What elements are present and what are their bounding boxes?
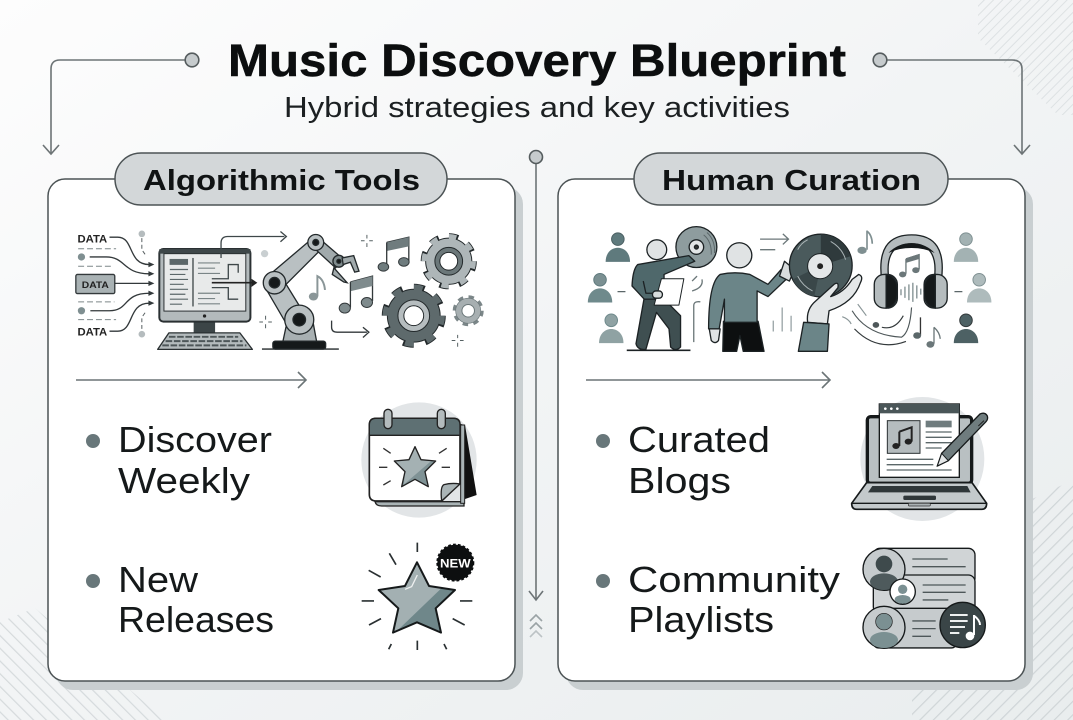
heading pill: algorithmic tools <box>115 153 447 205</box>
icon: open hand <box>798 274 862 351</box>
heading pill: algorithmic tools: Algorithmic Tools <box>143 165 420 197</box>
bullet: discover weekly <box>86 419 272 501</box>
bullet: new releases: Releases <box>118 599 274 640</box>
arrow: center divider <box>529 150 543 637</box>
icon: headphones <box>874 235 947 308</box>
icon: gears <box>387 238 481 342</box>
title: Music Discovery Blueprint <box>228 35 846 86</box>
sound waves and notes <box>760 231 940 348</box>
icon: robot arm <box>262 235 359 349</box>
subtitle: Hybrid strategies and key activities <box>284 92 790 124</box>
icon: calendar star <box>361 402 477 518</box>
illustration: data to machine <box>76 231 481 349</box>
illustration: curators and vinyl <box>588 227 991 351</box>
bullet: new releases <box>86 559 274 640</box>
sparkles <box>259 235 464 347</box>
icon: new star <box>362 543 473 650</box>
arrow: left connector <box>43 53 199 154</box>
arrow: left flow <box>76 372 306 388</box>
heading pill: human curation <box>634 153 948 205</box>
icon: desktop computer <box>158 232 286 349</box>
bullet: curated blogs: Curated <box>628 419 770 460</box>
audience icons <box>588 233 991 343</box>
data inputs <box>76 231 154 339</box>
bullet: new releases: New <box>118 559 199 600</box>
heading pill: human curation: Human Curation <box>662 165 921 197</box>
bullet: discover weekly: Weekly <box>118 460 250 501</box>
bullet: community playlists: Community <box>628 559 840 600</box>
bullet: curated blogs: Blogs <box>628 460 731 501</box>
panel: algorithmic tools <box>48 153 523 690</box>
data inputs: DATA <box>77 233 107 245</box>
panel: human curation <box>558 153 1033 690</box>
icon: music notes <box>309 237 409 337</box>
figure: curator holding vinyl <box>709 243 794 351</box>
icon: new star: NEW <box>440 557 471 571</box>
arrow: right flow <box>586 372 830 388</box>
icon: laptop blog <box>852 397 988 521</box>
data inputs: DATA <box>77 327 107 339</box>
bullet: community playlists <box>596 559 840 640</box>
figure: curator with record <box>627 227 717 350</box>
bullet: community playlists: Playlists <box>628 599 774 640</box>
icon: community playlists <box>863 548 985 648</box>
icon: vinyl record <box>789 234 852 297</box>
arrow: right connector <box>873 53 1030 154</box>
bullet: discover weekly: Discover <box>118 419 272 460</box>
data inputs: DATA <box>82 280 109 291</box>
bullet: curated blogs <box>596 419 770 501</box>
